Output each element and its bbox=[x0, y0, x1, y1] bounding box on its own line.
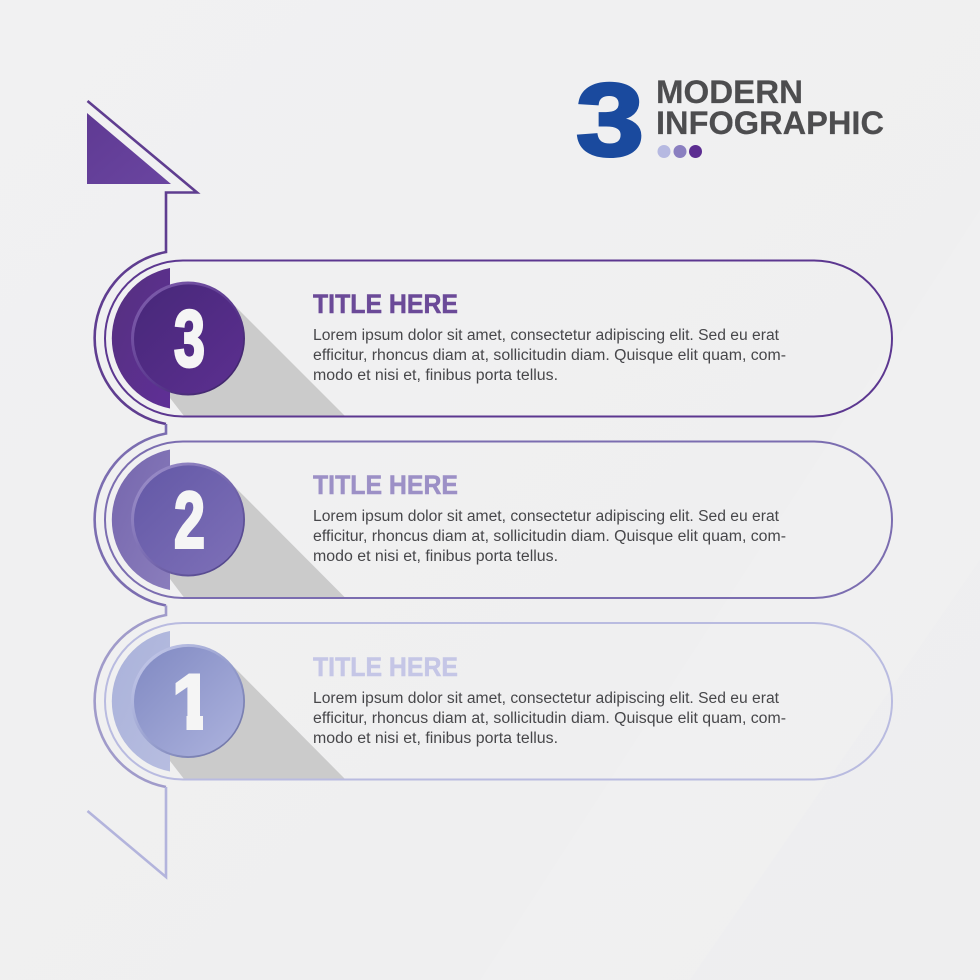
header bbox=[576, 62, 884, 178]
big number 3: 3 bbox=[576, 62, 644, 178]
number bbox=[176, 674, 203, 730]
arrow head triangle bbox=[87, 113, 171, 184]
number: 2 bbox=[174, 476, 205, 564]
half moon bbox=[112, 268, 170, 408]
number circle bbox=[131, 644, 245, 758]
body text: efficitur, rhoncus diam at, sollicitudin diam. Quisque elit quam, com- bbox=[313, 528, 786, 545]
number circle bbox=[131, 462, 245, 576]
card outline bbox=[105, 260, 892, 416]
title: TITLE HERE bbox=[313, 652, 458, 682]
title: TITLE HERE bbox=[313, 470, 458, 500]
body text bbox=[313, 508, 786, 565]
three dots bbox=[658, 145, 702, 158]
long shadow bbox=[170, 661, 345, 779]
body text: Lorem ipsum dolor sit amet, consectetur adipiscing elit. Sed eu erat bbox=[313, 508, 780, 525]
body text: modo et nisi et, finibus porta tellus. bbox=[313, 548, 558, 565]
body text: modo et nisi et, finibus porta tellus. bbox=[313, 730, 558, 747]
number circle bbox=[131, 282, 245, 396]
heading line 2: INFOGRAPHIC bbox=[656, 105, 884, 141]
card outline bbox=[105, 623, 892, 780]
body text: efficitur, rhoncus diam at, sollicitudin diam. Quisque elit quam, com- bbox=[313, 710, 786, 727]
body text: efficitur, rhoncus diam at, sollicitudin diam. Quisque elit quam, com- bbox=[313, 347, 786, 364]
panel: step 3 bbox=[105, 260, 892, 416]
long shadow bbox=[170, 299, 345, 416]
body text bbox=[313, 327, 786, 384]
number: 1 bbox=[172, 658, 212, 747]
body text: modo et nisi et, finibus porta tellus. bbox=[313, 367, 558, 384]
heading line 1: MODERN bbox=[656, 74, 803, 110]
panel: step 2 bbox=[105, 442, 892, 598]
long shadow bbox=[170, 480, 345, 598]
half moon bbox=[112, 450, 170, 590]
panel: step 1 bbox=[105, 623, 892, 780]
body text: Lorem ipsum dolor sit amet, consectetur adipiscing elit. Sed eu erat bbox=[313, 327, 780, 344]
arrow outline running down the left side bbox=[88, 101, 197, 877]
card outline bbox=[105, 442, 892, 598]
title: TITLE HERE bbox=[313, 289, 458, 319]
number: 3 bbox=[174, 294, 205, 383]
half moon bbox=[112, 631, 170, 772]
body text bbox=[313, 690, 786, 747]
body text: Lorem ipsum dolor sit amet, consectetur adipiscing elit. Sed eu erat bbox=[313, 690, 780, 707]
